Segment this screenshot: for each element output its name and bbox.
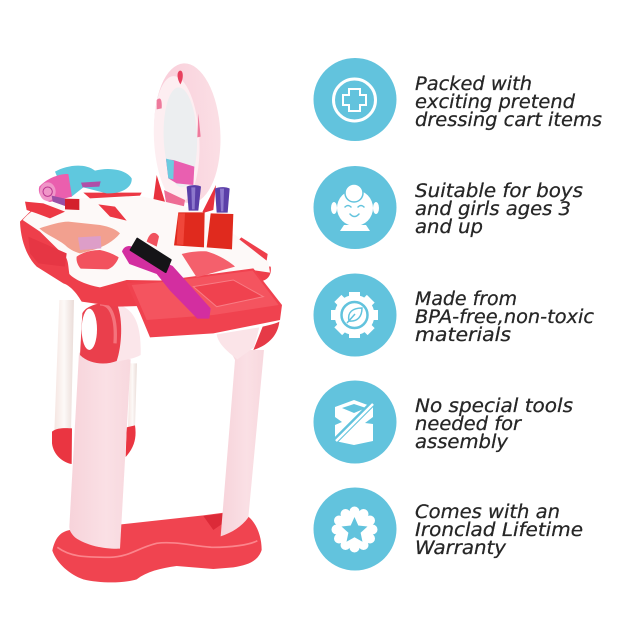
text: comes with: Comes with an <box>415 502 560 523</box>
nail polish right <box>207 187 233 249</box>
text: made from: materials <box>415 325 511 346</box>
lipstick <box>52 196 79 210</box>
side compartment <box>28 237 67 267</box>
base <box>52 513 262 582</box>
front left leg <box>69 353 131 549</box>
label <box>78 236 101 250</box>
icon: medical cross <box>314 58 396 141</box>
icon: star badge <box>314 488 396 570</box>
text: suitable: and up <box>415 217 483 238</box>
text: comes with: Ironclad Lifetime <box>415 520 583 541</box>
feature 2 <box>314 166 583 249</box>
toy dressing cart: lower stand <box>52 300 279 582</box>
accessory clips <box>25 193 142 221</box>
toy dressing cart: table top and accessories <box>20 62 282 337</box>
text: suitable: Suitable for boys <box>415 181 583 202</box>
back left foot <box>52 428 72 464</box>
wheel <box>80 303 121 363</box>
text: no special tools: No special tools <box>415 396 573 417</box>
icon: crossed out box <box>314 380 396 464</box>
feature 5 <box>314 488 583 570</box>
comb <box>182 251 235 277</box>
text: suitable: and girls ages 3 <box>415 199 571 220</box>
back right pole <box>128 363 137 427</box>
right collar <box>217 327 259 359</box>
text: no special tools: assembly <box>415 432 509 453</box>
nail polish left <box>174 185 205 247</box>
text: packed with: Packed with <box>415 74 532 95</box>
front tray <box>127 268 282 337</box>
text: comes with: Warranty <box>415 538 507 559</box>
left collar <box>117 304 141 362</box>
back right foot <box>126 425 136 457</box>
mirror <box>151 62 224 210</box>
right bracket <box>253 322 279 350</box>
hair dryer <box>39 166 132 202</box>
text: made from: BPA-free,non-toxic <box>415 307 594 328</box>
text: made from: Made from <box>415 289 517 310</box>
text: no special tools: needed for <box>415 414 522 435</box>
right end strip <box>239 237 268 261</box>
hair brush <box>122 239 211 319</box>
front right leg <box>221 350 264 536</box>
red tray body <box>20 210 271 307</box>
white table top <box>23 197 270 287</box>
pink pad <box>76 250 119 269</box>
text: packed with: exciting pretend <box>415 92 575 113</box>
pink inset <box>39 222 120 253</box>
icon: gear with leaf <box>314 274 396 356</box>
mirror support <box>153 175 216 213</box>
feature 1 <box>314 58 602 141</box>
small knob <box>147 233 159 247</box>
feature 3 <box>314 274 594 356</box>
text: packed with: dressing cart items <box>415 110 602 131</box>
icon: baby face <box>314 166 396 249</box>
back left pole <box>54 300 74 432</box>
feature 4 <box>314 380 573 464</box>
